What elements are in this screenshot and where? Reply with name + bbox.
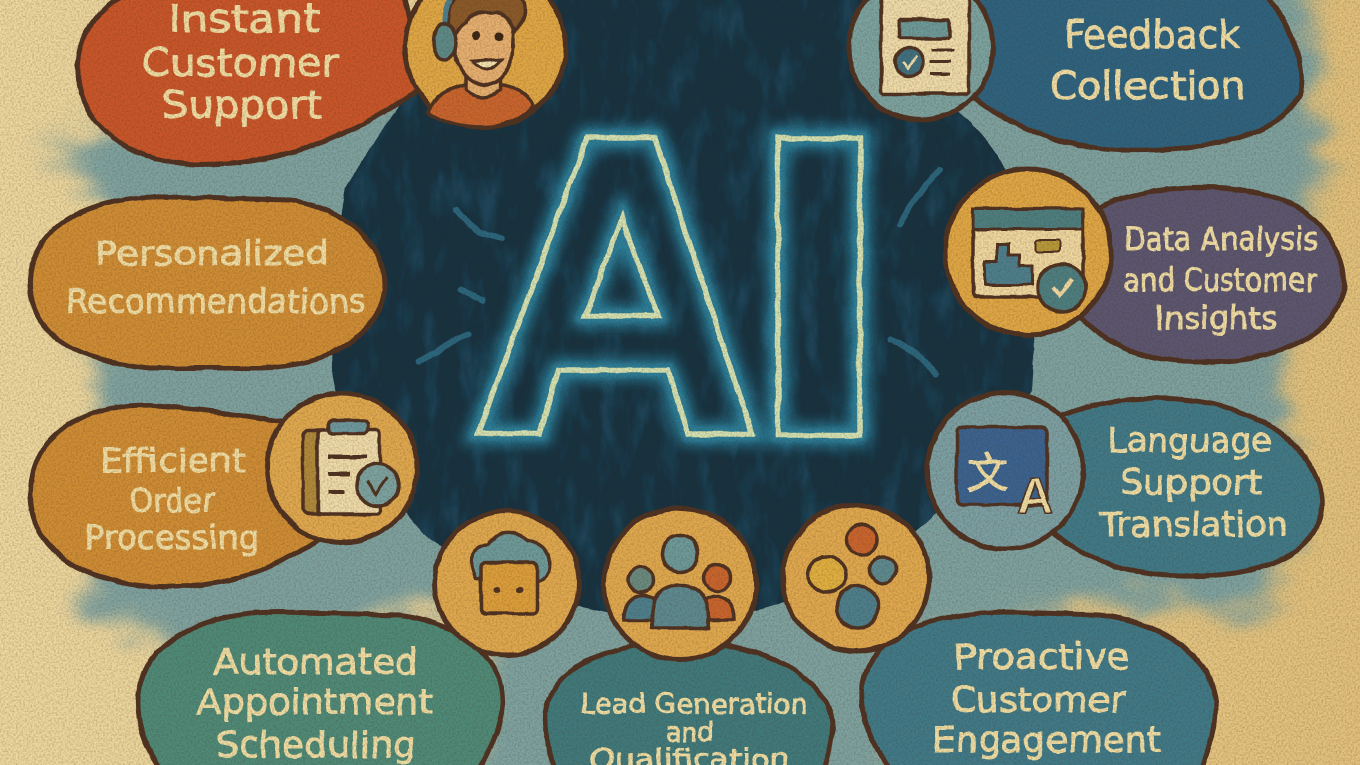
panel: lead generation and qualification xyxy=(545,642,832,765)
icon: feedback form xyxy=(849,0,993,120)
panel: personalized recommendations: Personalized xyxy=(95,234,329,274)
AI outline xyxy=(478,138,860,435)
AI lettering xyxy=(478,138,860,435)
icon: people group xyxy=(604,508,756,660)
panel: automated appointment scheduling xyxy=(138,612,503,765)
panel: proactive customer engagement: Customer xyxy=(951,680,1125,721)
panel: proactive customer engagement xyxy=(862,612,1216,765)
icon: dashboard chart xyxy=(945,169,1111,335)
AI glow xyxy=(478,138,860,435)
panel: efficient order processing: Processing xyxy=(84,518,260,557)
panel: automated appointment scheduling: Scheduling xyxy=(216,725,416,765)
panel: feedback collection xyxy=(960,0,1302,150)
icon: clipboard check xyxy=(267,393,417,543)
panel: efficient order processing: Efficient xyxy=(100,441,246,480)
AI teal band xyxy=(478,138,860,435)
panel: proactive customer engagement: Proactive xyxy=(954,637,1130,678)
panel: language support translation: Translation xyxy=(1099,505,1288,545)
central dark circle xyxy=(332,0,1034,622)
panel: language support translation: Support xyxy=(1120,463,1262,503)
icon: cloud bot xyxy=(435,511,579,655)
panel: language support translation xyxy=(1040,398,1322,576)
panel: instant customer support: Customer xyxy=(142,41,338,85)
panel: language support translation: Language xyxy=(1108,421,1272,461)
panel: automated appointment scheduling: Appointment xyxy=(197,682,433,723)
icon: translation xyxy=(927,393,1083,549)
panel: feedback collection: Collection xyxy=(1050,64,1246,108)
panel: proactive customer engagement: Engagement xyxy=(932,720,1162,761)
panel: instant customer support xyxy=(78,0,425,165)
icon: headset agent xyxy=(405,0,565,127)
panel: feedback collection: Feedback xyxy=(1064,13,1240,57)
panel: data analysis and customer insights xyxy=(1075,187,1344,362)
panel: data analysis and customer insights: and Customer xyxy=(1124,261,1317,299)
panel: efficient order processing: Order xyxy=(130,481,215,520)
panel: lead generation and qualification: Lead Generation xyxy=(580,689,808,720)
panel: personalized recommendations: Recommendations xyxy=(66,282,366,322)
brush streaks xyxy=(320,0,1050,630)
panel: lead generation and qualification: and xyxy=(666,717,714,748)
circuit traces xyxy=(418,170,940,375)
icon: translation: 文 xyxy=(967,440,1009,501)
icon: connected dots xyxy=(783,505,929,651)
panel: automated appointment scheduling: Automated xyxy=(214,642,418,683)
panel: data analysis and customer insights: Data Analysis xyxy=(1124,220,1318,258)
panel: data analysis and customer insights: Insights xyxy=(1154,299,1278,337)
icon: translation: A xyxy=(1017,468,1053,524)
panel: instant customer support: Support xyxy=(162,83,322,127)
panel: efficient order processing xyxy=(30,405,325,587)
panel: personalized recommendations xyxy=(30,197,385,368)
